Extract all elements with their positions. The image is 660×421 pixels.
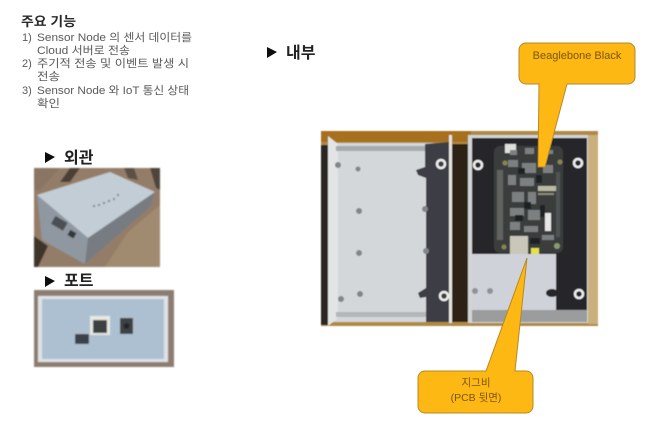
list of functions: 주기적 전송 및 이벤트 발생 시 xyxy=(37,57,189,70)
right half of case xyxy=(468,135,588,323)
Beaglebone Black board xyxy=(494,144,563,254)
heading: exterior: 외관 xyxy=(64,149,94,167)
list of functions: 2) xyxy=(22,58,32,70)
callout: Zigbee xyxy=(418,258,533,413)
heading: exterior xyxy=(45,149,94,167)
heading: interior xyxy=(267,44,316,62)
list of functions: 3) xyxy=(22,85,32,97)
callout label xyxy=(451,377,501,404)
list of functions: 확인 xyxy=(37,97,60,110)
heading: ports: 포트 xyxy=(64,273,94,290)
list of functions xyxy=(22,31,192,110)
callout: Beaglebone Black xyxy=(519,43,635,167)
gap between the halves xyxy=(452,144,469,322)
photo: enclosure interior xyxy=(321,131,598,326)
text block: main functions xyxy=(21,14,192,110)
photo: enclosure exterior xyxy=(34,168,160,267)
list of functions: 1) xyxy=(22,32,32,44)
heading: ports xyxy=(45,273,94,290)
photo: port panel xyxy=(34,290,174,367)
callout label: 지그비 xyxy=(462,377,490,389)
heading: interior: 내부 xyxy=(286,44,316,62)
callout label: (PCB 뒷면) xyxy=(451,391,501,404)
list of functions: Sensor Node 와 IoT 통신 상태 xyxy=(37,84,189,97)
list of functions: 전송 xyxy=(37,70,60,83)
left half of case xyxy=(328,135,452,326)
list of functions: Cloud 서버로 전송 xyxy=(37,44,130,57)
wood background xyxy=(321,131,598,326)
heading: main functions: 주요 기능 xyxy=(21,14,76,29)
callout label: Beaglebone Black xyxy=(533,50,622,62)
list of functions: Sensor Node 의 센서 데이터를 xyxy=(37,31,192,44)
